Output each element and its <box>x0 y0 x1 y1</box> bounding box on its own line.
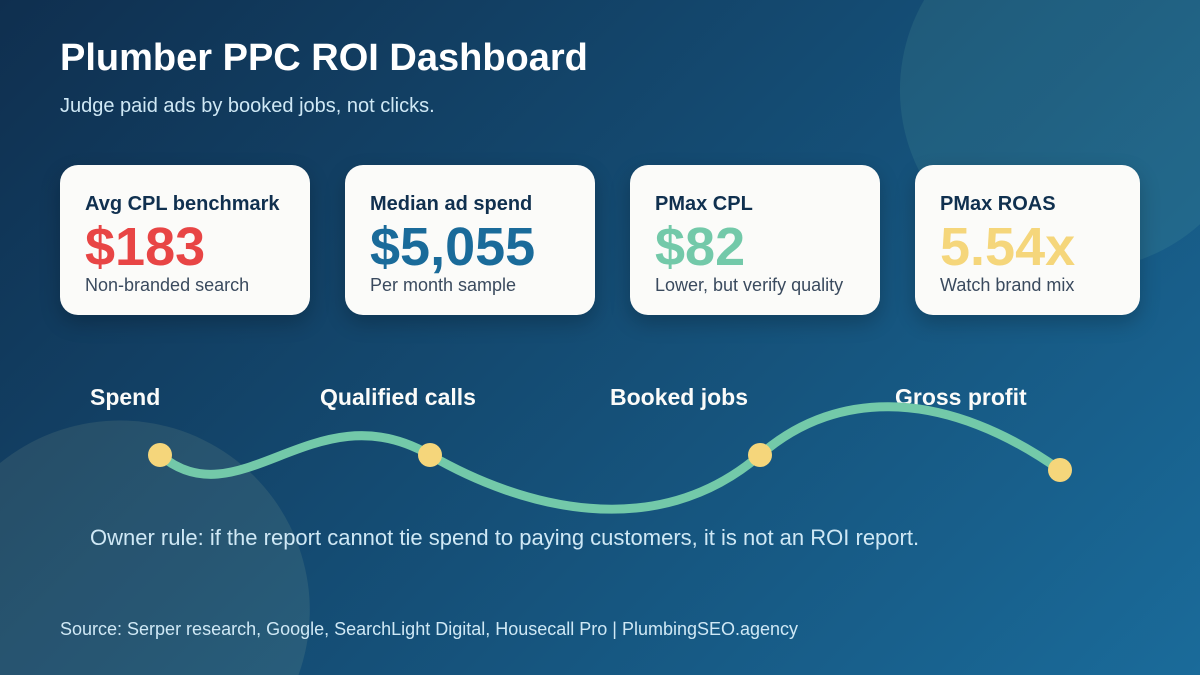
step label: Booked jobs: Booked jobs <box>610 384 748 410</box>
panel: avg CPL benchmark <box>60 165 310 315</box>
step label: Gross profit: Gross profit <box>895 384 1027 410</box>
step label: Spend: Spend <box>90 384 160 410</box>
panel: PMax CPL: $82 <box>655 217 745 277</box>
panel: PMax ROAS: 5.54x <box>940 217 1075 277</box>
panel: PMax CPL: Lower, but verify quality <box>655 275 843 295</box>
title: Plumber PPC ROI Dashboard <box>60 37 588 79</box>
panel: median ad spend: Per month sample <box>370 275 516 295</box>
panel: avg CPL benchmark: Non-branded search <box>85 275 249 295</box>
source line: Source: Serper research, Google, SearchLight Digital, Housecall Pro | PlumbingSEO.agency <box>60 619 798 639</box>
owner rule text: Owner rule: if the report cannot tie spend to paying customers, it is not an ROI report. <box>90 525 919 550</box>
step label: Qualified calls: Qualified calls <box>320 384 476 410</box>
panel: PMax ROAS <box>915 165 1140 315</box>
panel: avg CPL benchmark: $183 <box>85 217 205 277</box>
panel: PMax CPL: PMax CPL <box>655 193 753 215</box>
panel: median ad spend: Median ad spend <box>370 193 532 215</box>
panel: PMax ROAS: PMax ROAS <box>940 193 1056 215</box>
panel: PMax ROAS: Watch brand mix <box>940 275 1074 295</box>
panel: avg CPL benchmark: Avg CPL benchmark <box>85 193 280 215</box>
panel: median ad spend: $5,055 <box>370 217 535 277</box>
panel: median ad spend <box>345 165 595 315</box>
panel: PMax CPL <box>630 165 880 315</box>
subtitle: Judge paid ads by booked jobs, not clicks. <box>60 95 435 117</box>
